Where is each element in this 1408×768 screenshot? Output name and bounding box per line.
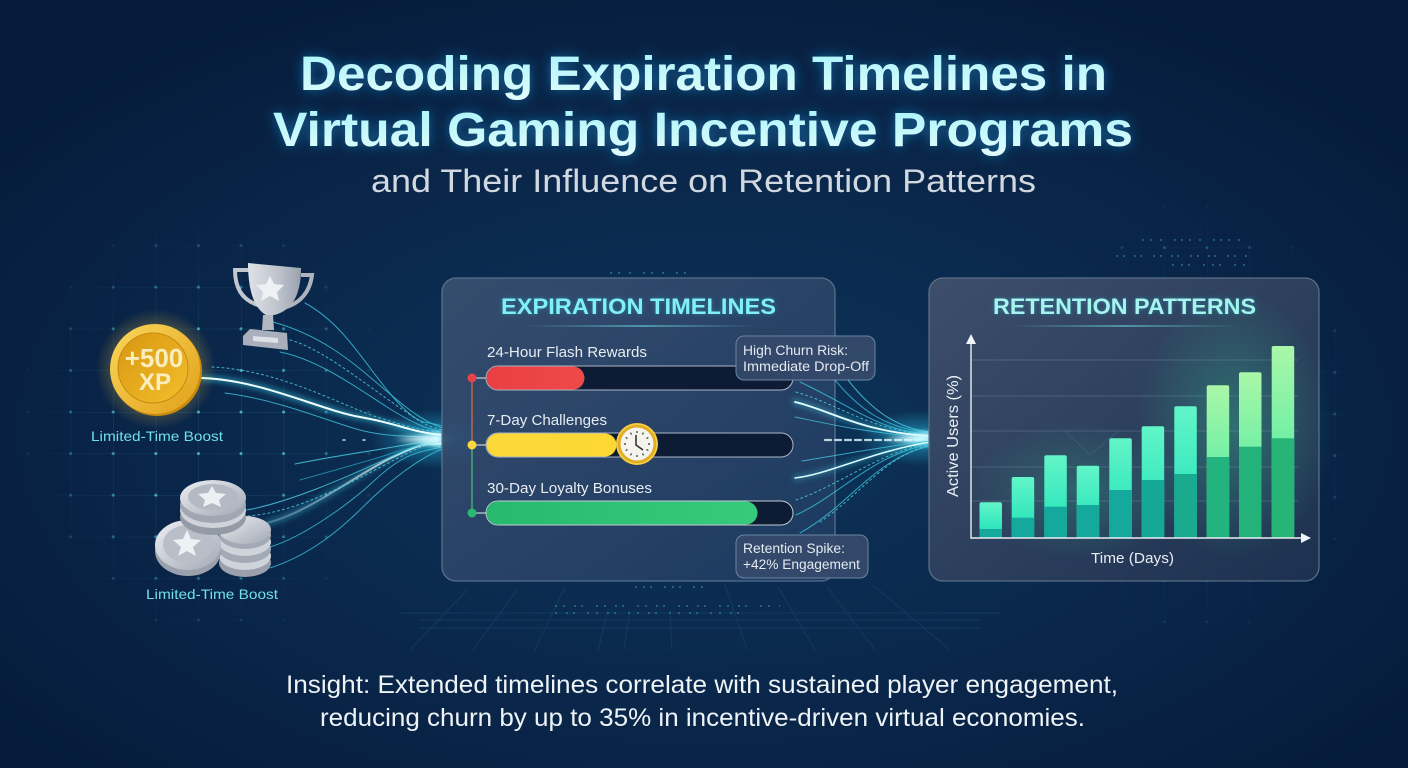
insight text [286, 671, 1118, 732]
x-axis label: Time (Days) [1091, 550, 1174, 567]
callout: high churn risk: High Churn Risk: [743, 343, 848, 358]
icon: silver coin stack [155, 480, 271, 577]
icon: clock [616, 423, 658, 465]
underline [1010, 325, 1240, 327]
title: Decoding Expiration Timelines in [300, 48, 1107, 101]
background perspective grid [400, 585, 1000, 650]
timeline connector [468, 374, 487, 518]
bar: 30-day [486, 501, 793, 525]
callout: high churn risk: Immediate Drop-Off [743, 359, 869, 374]
bar chart: active users over time [970, 290, 1335, 560]
bar: 24-hour [486, 366, 793, 390]
heading: expiration timelines: EXPIRATION TIMELINES [501, 294, 776, 319]
right data streams converging on retention panel [795, 380, 982, 533]
label: 30-day loyalty bonuses: 30-Day Loyalty Bonuses [487, 480, 652, 497]
label: limited-time boost (silver coins): Limited-Time Boost [146, 586, 278, 602]
callout: retention spike: Retention Spike: [743, 541, 845, 556]
callout: high churn risk [736, 336, 875, 380]
label: 24-hour flash rewards: 24-Hour Flash Rewards [487, 344, 647, 361]
bar: 7-day [486, 433, 793, 457]
title [273, 48, 1133, 157]
y-axis label: Active Users (%) [945, 375, 962, 497]
panel: retention patterns [929, 278, 1335, 581]
heading: retention patterns: RETENTION PATTERNS [993, 294, 1256, 319]
icon: gold +500 XP coin [96, 309, 216, 429]
chart axes [966, 334, 1311, 543]
insight text: Insight: Extended timelines correlate with sustained player engagement, [286, 671, 1118, 699]
background grid: left [26, 242, 370, 622]
title: Virtual Gaming Incentive Programs [273, 104, 1133, 157]
subtitle: and Their Influence on Retention Patterns [371, 163, 1036, 199]
icon: gold +500 XP coin: +500 [125, 343, 183, 373]
label: 7-day challenges: 7-Day Challenges [487, 412, 607, 429]
callout: retention spike [736, 535, 868, 578]
icon: gold +500 XP coin: XP [139, 369, 171, 396]
background grid: right [1120, 205, 1340, 624]
callout: retention spike: +42% Engagement [743, 557, 860, 572]
insight text: reducing churn by up to 35% in incentive-driven virtual economies. [320, 704, 1085, 732]
background dot clusters [555, 240, 1250, 613]
underline [525, 325, 760, 327]
left data streams converging on timeline panel [202, 303, 510, 568]
label: limited-time boost (gold coin): Limited-Time Boost [91, 428, 223, 444]
panel: expiration timelines [442, 278, 875, 581]
icon: silver trophy [235, 263, 312, 350]
